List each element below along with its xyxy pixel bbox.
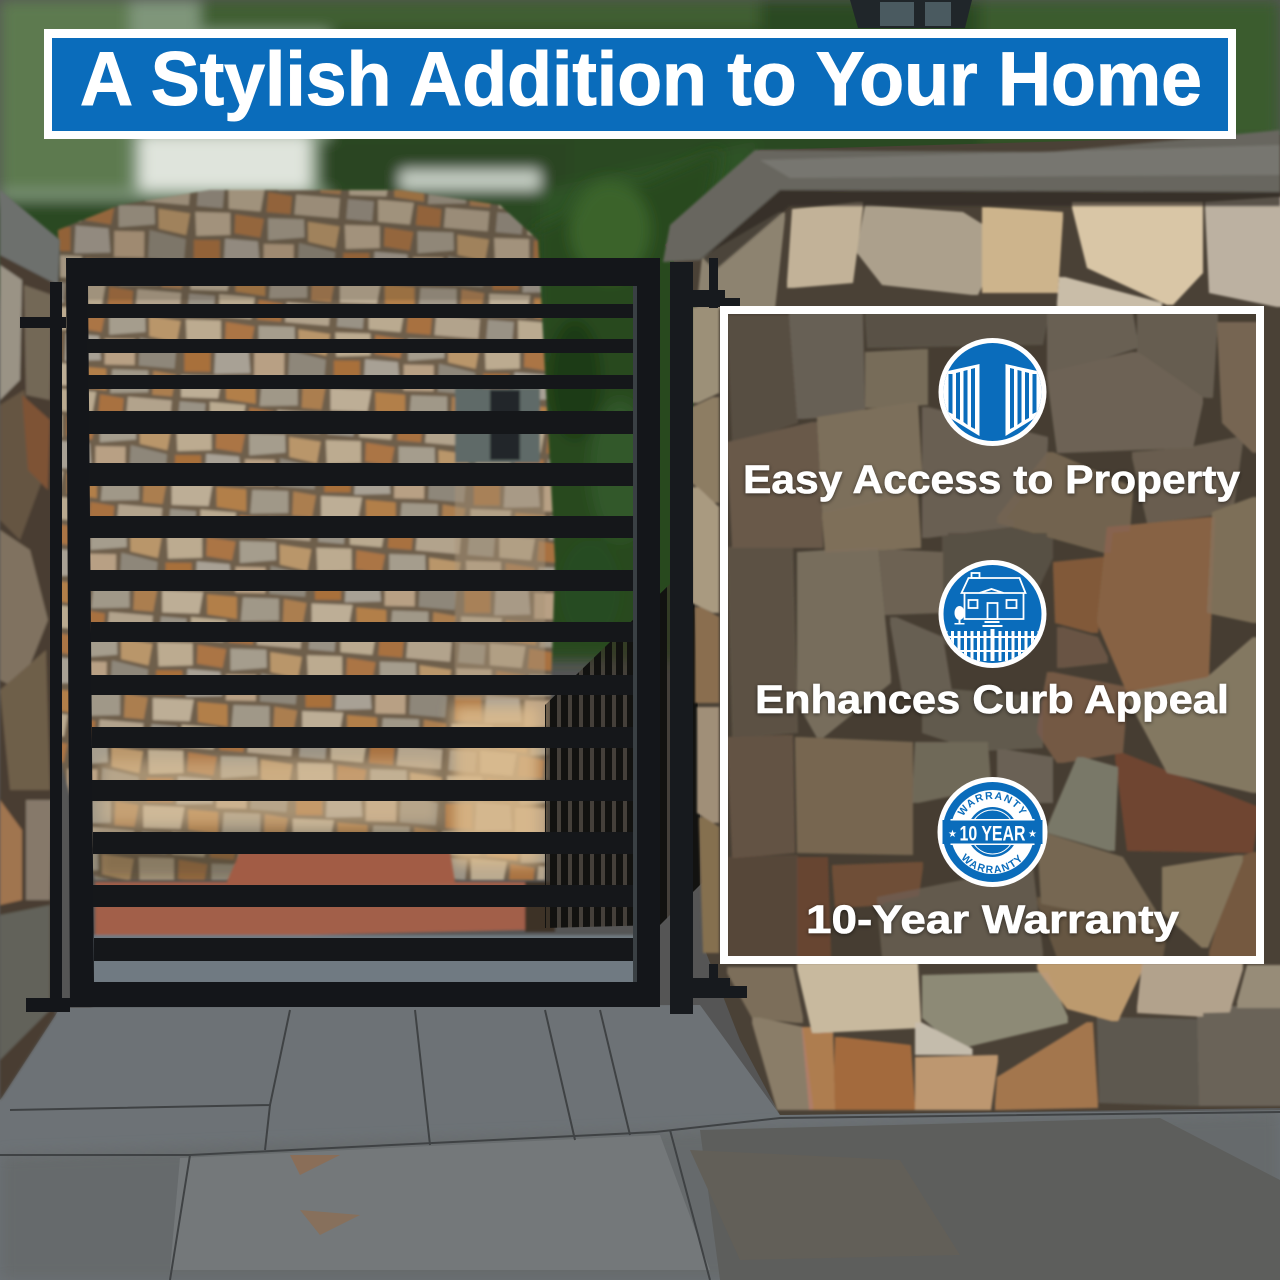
back stone wall xyxy=(58,190,555,880)
icon: warranty badge: ★ xyxy=(1028,829,1037,840)
label: warranty: 10-Year Warranty xyxy=(806,898,1180,942)
trees and sky xyxy=(0,0,1280,650)
icon: warranty badge: 10 YEAR xyxy=(960,822,1026,846)
left gate post and hinges xyxy=(20,282,70,1012)
label: curb appeal: Enhances Curb Appeal xyxy=(755,678,1229,722)
icon: warranty badge xyxy=(938,777,1048,887)
panel: benefits xyxy=(720,306,1264,964)
wall stones xyxy=(695,200,1280,1107)
sunlit wall patches xyxy=(95,705,540,880)
inner post highlight xyxy=(633,286,637,982)
left stone wall xyxy=(0,190,60,1100)
title: A Stylish Addition to Your Home xyxy=(80,37,1202,122)
hedge xyxy=(535,150,720,660)
lamp post xyxy=(850,0,972,28)
lower stones xyxy=(800,966,918,1030)
upper stones xyxy=(790,205,860,285)
right gate post and hinges xyxy=(670,258,747,1014)
icon: house and fence xyxy=(938,560,1046,668)
gate xyxy=(66,258,660,1007)
icon: warranty badge: WARRANTY xyxy=(957,792,1027,815)
side column stones xyxy=(695,310,716,400)
right stone wall xyxy=(663,130,1280,1115)
ground paving xyxy=(0,1005,1280,1280)
horizontal bars xyxy=(87,304,637,961)
wall cap xyxy=(663,130,1280,270)
label: easy access: Easy Access to Property xyxy=(743,458,1241,502)
icon: warranty badge: WARRANTY xyxy=(962,853,1022,874)
icon: warranty badge: ★ xyxy=(948,829,957,840)
courtyard paving xyxy=(92,852,652,1007)
title banner xyxy=(44,29,1236,139)
gate frame xyxy=(66,258,660,1007)
side iron fence xyxy=(545,555,705,928)
icon: opening gate xyxy=(938,338,1046,446)
stones behind panel xyxy=(730,318,795,440)
